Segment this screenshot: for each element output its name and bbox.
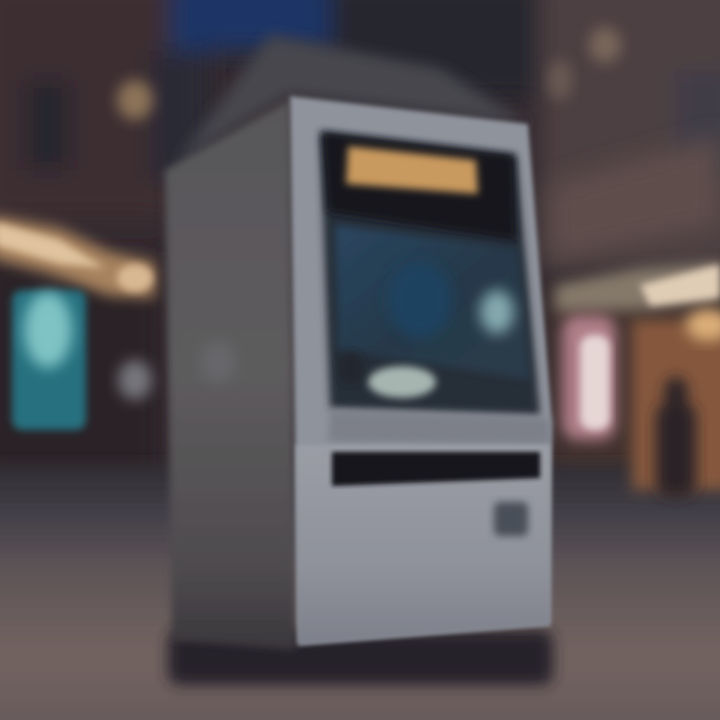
right shop lights — [548, 27, 720, 490]
background: street pavement — [0, 465, 720, 720]
ATM dark knob — [338, 352, 364, 384]
ATM black header — [322, 132, 516, 240]
ATM screen centre — [388, 262, 452, 338]
ATM side panel — [165, 100, 296, 650]
left shop lights — [0, 80, 155, 430]
ATM lower panel — [296, 445, 550, 645]
ATM cash slot — [332, 452, 540, 486]
ATM display recess — [320, 132, 540, 415]
ATM front panel — [290, 96, 552, 645]
ATM orange sign — [346, 146, 478, 194]
ATM shelf — [328, 410, 550, 445]
ATM machine — [165, 35, 552, 650]
ATM screen glow — [480, 290, 514, 334]
ATM ground shadow — [168, 630, 553, 685]
silhouette: pedestrian — [656, 377, 696, 497]
ATM receipt slot — [494, 502, 528, 536]
ATM keypad highlight — [368, 366, 436, 398]
ATM side button — [202, 342, 234, 382]
ATM top housing — [175, 35, 530, 165]
ATM screen — [335, 225, 530, 380]
